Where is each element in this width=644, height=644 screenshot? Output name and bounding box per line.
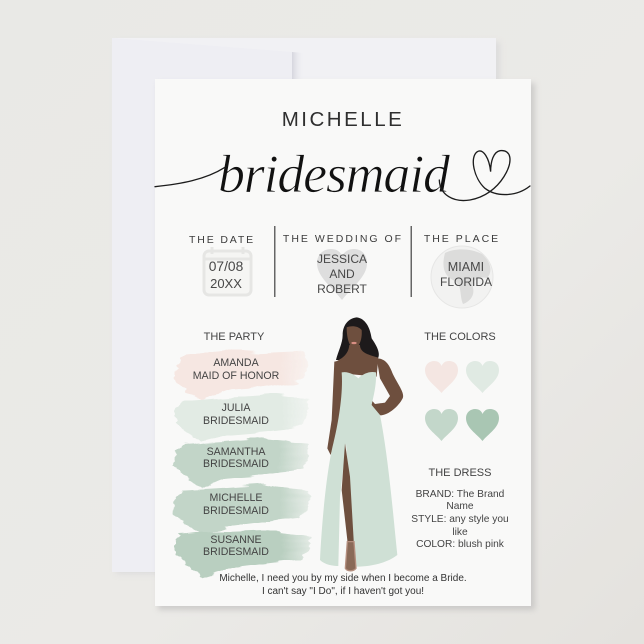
member: Julia: BRIDESMAID — [203, 415, 269, 427]
heading: THE DRESS — [429, 467, 491, 479]
member: Susanne: BRIDESMAID — [203, 546, 269, 558]
illustration: bridesmaid figure — [320, 317, 403, 571]
member: Samantha — [203, 446, 269, 470]
divider — [410, 226, 412, 297]
member: Michelle: MICHELLE — [210, 492, 262, 504]
icon: globe — [431, 246, 493, 308]
swatch heart — [425, 409, 458, 441]
closing message — [219, 573, 467, 597]
dress details: STYLE: any style you — [411, 514, 509, 525]
date year: 20XX — [210, 276, 242, 291]
swatch heart — [466, 361, 499, 393]
couple names — [317, 252, 368, 296]
icon: heart — [317, 249, 367, 300]
member: Julia: JULIA — [222, 402, 251, 414]
member: Michelle: BRIDESMAID — [203, 505, 269, 517]
invitation card — [155, 79, 535, 610]
the date heading: THE DATE — [189, 234, 255, 246]
title: bridesmaid script — [155, 144, 530, 204]
envelope — [112, 38, 500, 574]
dress details: Name — [446, 501, 474, 512]
heading: THE COLORS — [424, 331, 496, 343]
couple names: JESSICA — [317, 252, 367, 266]
member: Samantha: SAMANTHA — [207, 446, 266, 458]
closing message: I can't say "I Do", if I haven't got you! — [262, 586, 424, 597]
swatch hearts — [425, 361, 458, 393]
member: Julia — [203, 402, 269, 427]
dress details — [411, 489, 509, 550]
divider — [274, 226, 276, 297]
lips — [351, 342, 357, 344]
panel: the colors — [424, 331, 499, 441]
info row — [189, 226, 500, 308]
the wedding of heading: THE WEDDING OF — [283, 233, 403, 245]
dress details: COLOR: blush pink — [416, 539, 505, 550]
torso and shoulder — [336, 345, 378, 377]
panel: the dress — [411, 467, 509, 550]
face — [347, 326, 362, 348]
member: Amanda — [193, 357, 280, 382]
place name — [440, 260, 492, 289]
place name: MIAMI — [448, 260, 484, 274]
title: bridesmaid script: bridesmaid — [218, 144, 451, 204]
member: Susanne — [203, 534, 269, 558]
couple names: AND — [329, 267, 355, 281]
date value: 07/08 — [209, 259, 244, 274]
shoe — [345, 542, 356, 571]
member: Amanda: AMANDA — [213, 357, 260, 369]
brush strokes — [174, 351, 312, 578]
dress details: like — [452, 527, 468, 538]
dress — [320, 372, 397, 567]
the place heading: THE PLACE — [424, 233, 500, 245]
dress details: BRAND: The Brand — [416, 489, 505, 500]
heading: THE PARTY — [204, 331, 265, 343]
member: Michelle — [203, 492, 269, 517]
panel: the party — [174, 331, 312, 578]
swash and heart flourish — [155, 151, 530, 201]
icon: calendar — [204, 247, 251, 295]
couple names: ROBERT — [317, 282, 368, 296]
place name: FLORIDA — [440, 275, 492, 289]
arm right — [365, 358, 403, 415]
member: Samantha: BRIDESMAID — [203, 458, 269, 470]
member: Amanda: MAID OF HONOR — [193, 370, 280, 382]
member: Susanne: SUSANNE — [210, 534, 262, 546]
swatch heart — [466, 409, 499, 441]
leg — [342, 443, 354, 558]
hair back — [336, 317, 379, 360]
arm left — [327, 360, 343, 455]
closing message: Michelle, I need you by my side when I become a Bride. — [219, 573, 467, 584]
title: name: MICHELLE — [282, 108, 404, 131]
